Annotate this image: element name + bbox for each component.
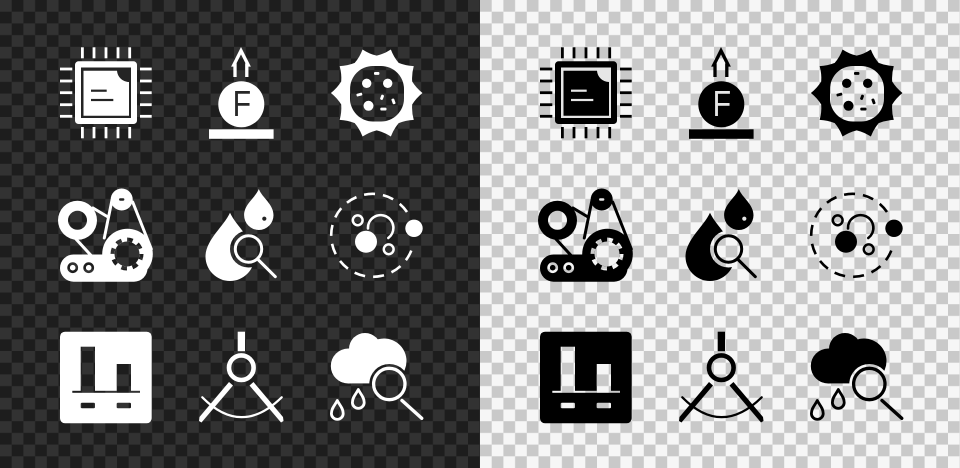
icon: drawing compass: [199, 332, 284, 422]
icon: fluorine F ball with up arrow: F: [713, 85, 731, 125]
icon: spiky virus: [811, 46, 902, 140]
icon: drops with magnifier: [686, 189, 755, 281]
icon: processor chip: [540, 47, 632, 138]
icon: bar chart panel: [540, 332, 632, 423]
icon: drops with magnifier: [206, 189, 275, 281]
icon: fluorine F ball with up arrow: F: [233, 85, 251, 125]
icon: fluorine F ball with up arrow: [689, 51, 754, 139]
icon: processor chip: [60, 47, 152, 138]
icon: orbit molecules: [811, 194, 903, 277]
icon: rain cloud with magnifier: [331, 333, 422, 419]
icon: drawing compass: [679, 332, 764, 422]
icon: belt and pulleys: [538, 188, 633, 282]
icon: belt and pulleys: [58, 188, 153, 282]
light checkered background: [480, 0, 960, 468]
icon: spiky virus: [331, 46, 423, 140]
icon: rain cloud with magnifier: [811, 333, 902, 419]
panel: dark checkered side: [0, 0, 480, 468]
icon: bar chart panel: [60, 332, 152, 423]
dark checkered background: [0, 0, 480, 468]
icon: fluorine F ball with up arrow: [209, 51, 274, 139]
panel: light checkered side: [480, 0, 960, 468]
icon: orbit molecules: [331, 194, 423, 277]
